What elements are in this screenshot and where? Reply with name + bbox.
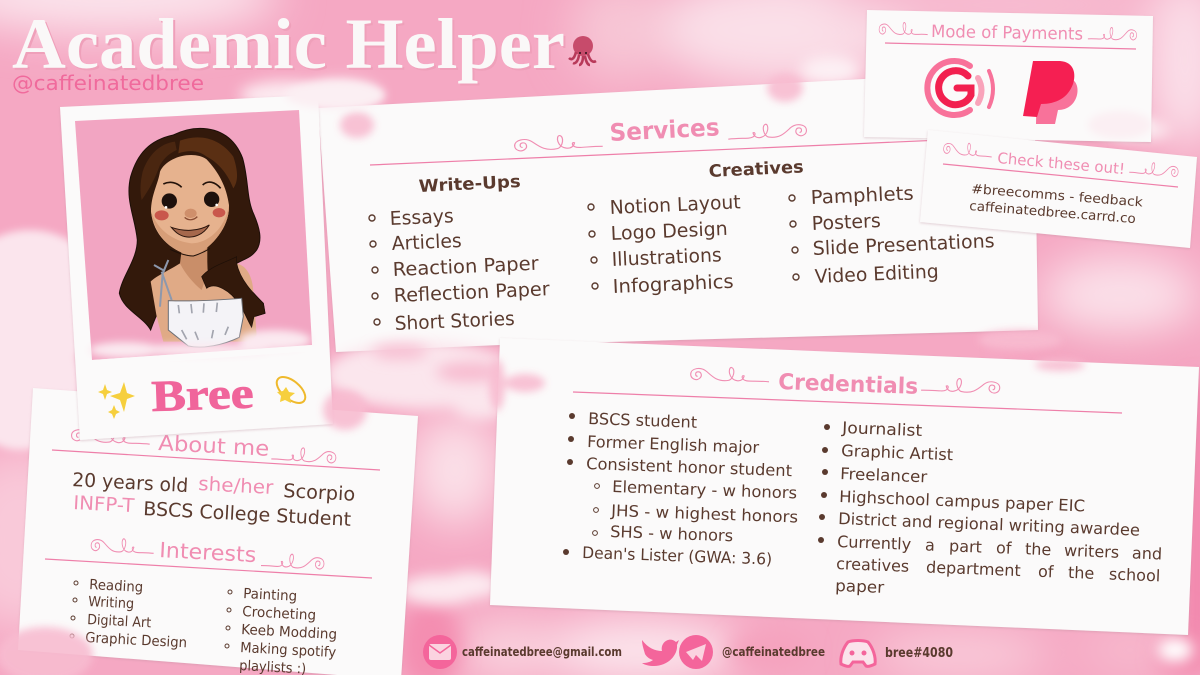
creatives list: Logo Design <box>610 218 728 245</box>
dress <box>168 298 243 347</box>
footer contacts: caffeinatedbree@gmail.com <box>462 645 622 659</box>
right strand <box>202 257 265 327</box>
write-ups list: Short Stories <box>394 308 515 335</box>
footer contacts: @caffeinatedbree <box>722 645 825 659</box>
about me details: BSCS College Student <box>143 498 352 531</box>
payments heading: Mode of Payments <box>931 22 1083 45</box>
credentials list left: Former English major <box>587 432 760 457</box>
interests heading: Interests <box>159 538 257 567</box>
creatives list: Slide Presentations <box>812 230 995 260</box>
cloud at foot of photo <box>89 330 311 358</box>
icon: discord <box>841 640 875 666</box>
credentials list right: of <box>1038 562 1054 581</box>
creatives list: Illustrations <box>611 244 722 271</box>
panel: services <box>318 70 1038 352</box>
credentials list left: Consistent honor student <box>586 454 792 480</box>
interests list: Making spotify <box>240 640 336 661</box>
about me heading <box>52 427 380 470</box>
links text: #breecomms - feedback <box>971 182 1144 211</box>
credentials list right: Currently <box>837 532 912 554</box>
panel: about me and interests <box>18 388 418 675</box>
icon: email <box>423 635 457 669</box>
creatives list: Pamphlets <box>810 183 914 209</box>
icon: GCash <box>927 61 993 115</box>
credentials list right: of <box>996 538 1012 558</box>
interests list: Reading <box>89 577 144 596</box>
interests list: Keeb Modding <box>241 622 337 643</box>
interests list: Digital Art <box>87 612 152 631</box>
services heading <box>370 113 1010 165</box>
credentials list right: school <box>1109 564 1161 585</box>
icon: sparkles <box>98 382 135 419</box>
interests heading <box>45 537 372 578</box>
about me details: Scorpio <box>283 480 356 506</box>
brows, eyes, cheeks, nose, mouth <box>163 182 221 188</box>
creatives list <box>588 157 995 298</box>
icon: octopus <box>569 36 596 65</box>
hair back <box>119 128 265 330</box>
handle: @caffeinatedbree <box>12 71 204 95</box>
about me details: she/her <box>198 473 274 499</box>
footer contacts <box>423 635 953 669</box>
icon: dizzy comet <box>272 372 310 408</box>
services heading: Services <box>609 113 720 147</box>
credentials list right: paper <box>835 576 885 597</box>
interests list: Crocheting <box>242 604 317 624</box>
credentials list left: Dean's Lister (GWA: 3.6) <box>582 543 772 569</box>
title: Academic Helper <box>12 4 565 84</box>
about me details: 20 years old <box>72 469 189 497</box>
about me details <box>72 469 356 531</box>
crown highlight <box>178 137 237 188</box>
name: Bree: Bree <box>151 368 254 421</box>
check heading <box>943 141 1179 187</box>
write-ups list: Write-Ups <box>418 172 521 197</box>
links text: caffeinatedbree.carrd.co <box>969 199 1136 227</box>
write-ups list: Reaction Paper <box>392 253 539 281</box>
footer contacts: bree#4080 <box>885 646 953 661</box>
creatives list: Infographics <box>612 271 734 298</box>
creatives list: Video Editing <box>814 261 939 288</box>
arms and chest <box>151 257 257 342</box>
credentials list right: writers <box>1064 541 1120 562</box>
photo background <box>75 110 312 360</box>
credentials list right: the <box>1068 563 1095 583</box>
interests list: Writing <box>88 594 135 612</box>
credentials list right: department <box>926 557 1021 580</box>
title: Academic Helper <box>14 6 567 86</box>
credentials list right: and <box>1132 543 1162 563</box>
credentials list right: a <box>925 535 935 555</box>
panel: polaroid photo of Bree <box>60 95 333 440</box>
about me heading: About me <box>158 431 270 461</box>
write-ups list: Reflection Paper <box>393 278 550 307</box>
about me details: INFP-T <box>73 492 135 517</box>
check heading: Check these out! <box>997 149 1126 178</box>
credentials list right: Freelancer <box>840 464 928 486</box>
creatives list: Creatives <box>708 157 804 182</box>
credentials list right: Journalist <box>841 418 923 440</box>
write-ups list: Articles <box>391 230 462 255</box>
credentials list right: District and regional writing awardee <box>838 509 1140 540</box>
write-ups list: Essays <box>389 205 454 230</box>
credentials list left <box>563 409 798 569</box>
credentials list right: Graphic Artist <box>841 441 953 464</box>
creatives list: Posters <box>811 210 881 235</box>
credentials list right: part <box>949 536 982 557</box>
links text <box>969 182 1144 227</box>
write-ups list <box>369 172 550 335</box>
icon: PayPal <box>1023 61 1078 124</box>
icon: telegram <box>679 635 713 669</box>
interests list: Painting <box>243 586 298 605</box>
creatives list: Notion Layout <box>609 191 741 219</box>
credentials heading: Credentials <box>778 370 919 400</box>
panel: credentials <box>490 338 1199 635</box>
left cloud <box>0 230 105 450</box>
strap and bow <box>154 260 172 307</box>
credentials heading <box>573 366 1122 413</box>
panel: check these out <box>920 130 1197 248</box>
credentials list right: the <box>1025 539 1052 559</box>
credentials list left: JHS - w highest honors <box>610 501 798 527</box>
credentials list right <box>818 418 1162 597</box>
clouds across the gap between services and lower panels <box>325 341 515 420</box>
avatar illustration <box>119 128 265 347</box>
credentials list right: creatives <box>836 554 910 576</box>
interests list: Graphic Design <box>85 630 187 651</box>
icon: twitter <box>642 640 679 666</box>
interests list <box>70 577 337 675</box>
payments heading <box>879 22 1137 49</box>
credentials list left: Elementary - w honors <box>612 477 797 502</box>
face <box>151 155 229 256</box>
panel: mode of payments <box>864 10 1153 142</box>
credentials list left: SHS - w honors <box>610 522 733 545</box>
credentials list left: BSCS student <box>588 409 697 432</box>
credentials list right: Highschool campus paper EIC <box>839 487 1085 515</box>
